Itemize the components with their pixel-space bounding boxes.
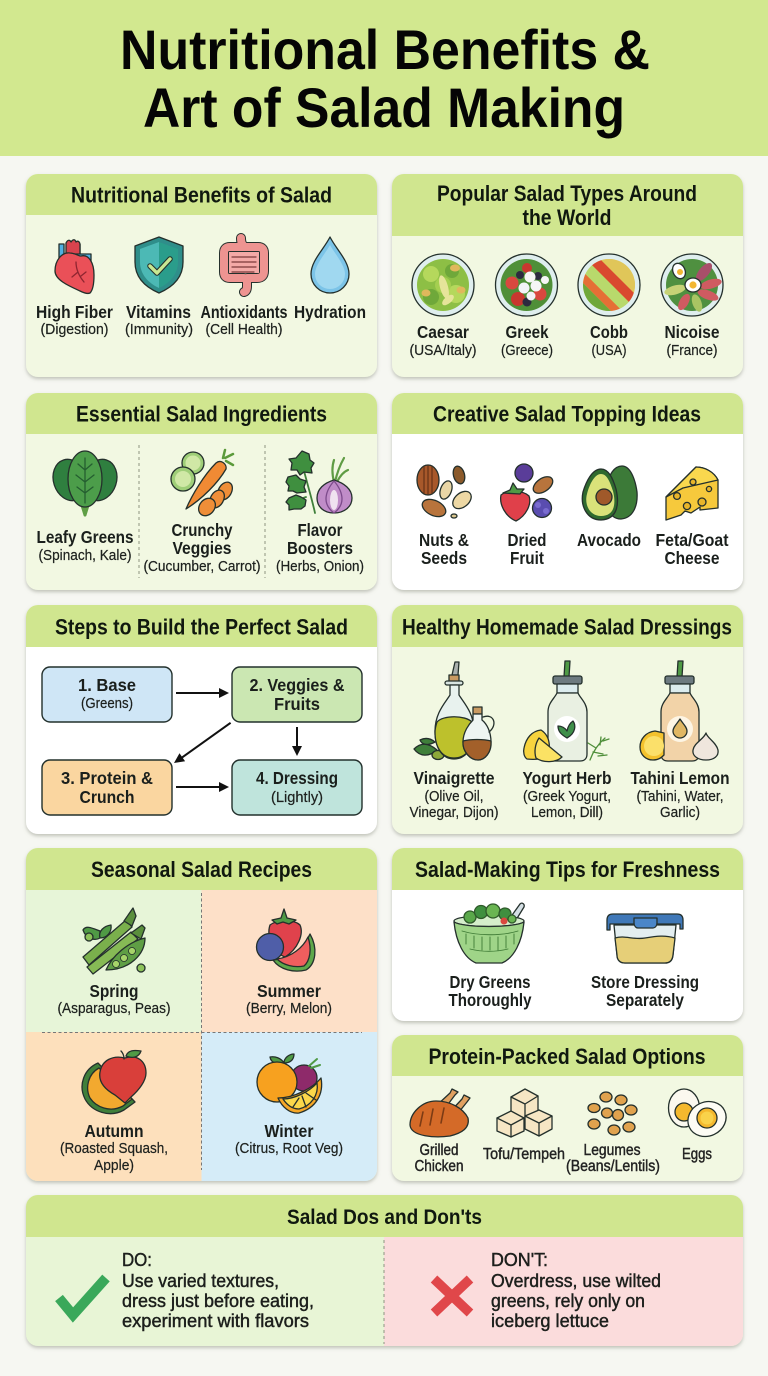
panel: dos and don'ts [26,1195,743,1346]
panel: protein options [392,1035,743,1181]
labels: Autumn [84,1121,144,1141]
heading: Creative Salad Topping Ideas [433,402,701,426]
do text [122,1250,314,1331]
heading: Salad-Making Tips for Freshness [415,857,720,882]
labels: Boosters [287,538,353,558]
labels: High Fiber [36,302,113,322]
labels: (USA/Italy) [410,342,476,359]
labels [448,972,699,1010]
step 2: 2. Veggies & [250,675,345,695]
labels: (Citrus, Root Veg) [235,1140,343,1157]
step 4: 4. Dressing [256,768,338,788]
do text: dress just before eating, [122,1291,314,1311]
heading: Salad Dos and Don'ts [287,1206,482,1229]
labels: Garlic) [660,804,700,821]
panel: toppings [392,393,743,590]
labels: Crunchy [172,520,233,540]
icon: herbs and onion [286,451,352,513]
labels: Nuts & [419,530,469,550]
labels: (Asparagus, Peas) [58,1000,170,1017]
labels: Separately [606,990,684,1010]
icon: spring asparagus [83,908,145,974]
step 2 [232,667,362,722]
labels: (Greek Yogurt, [523,788,611,805]
labels: Antioxidants [200,302,288,322]
icon: heart [55,240,94,293]
labels: (Olive Oil, [424,788,484,805]
step 1: 1. Base [78,675,136,695]
icon: shield [135,237,183,293]
title banner: Art of Salad Making [143,76,625,139]
heading [437,181,697,230]
icon: water drop [311,237,349,293]
labels: Lemon, Dill) [531,804,603,821]
labels: Hydration [294,302,366,322]
icon: summer fruits [256,909,315,971]
labels: Seeds [421,548,467,568]
labels [419,530,729,568]
labels: Avocado [577,530,641,550]
icon: winter citrus and beet [257,1054,322,1113]
labels [410,768,730,821]
labels: Vitamins [126,302,191,322]
labels: Apple) [94,1157,134,1174]
icon: caesar plate [412,254,474,316]
panel: freshness tips [392,848,743,1021]
labels: Cheese [664,548,720,568]
labels: Dry Greens [450,972,531,992]
labels: Flavor [298,520,343,540]
labels: Vinegar, Dijon) [410,804,498,821]
labels: (France) [666,342,718,359]
step 3: Crunch [80,787,134,807]
icon: tofu cubes [497,1089,552,1137]
heading: Nutritional Benefits of Salad [71,182,332,208]
labels: Thoroughly [448,990,532,1010]
don't text: iceberg lettuce [491,1311,609,1331]
labels: (Digestion) [40,321,108,338]
title banner [0,0,768,156]
labels: Nicoise [664,322,720,342]
panel: salad types [392,174,743,377]
labels [36,520,364,575]
labels: Store Dressing [591,972,699,992]
icon: boiled eggs [668,1089,732,1143]
labels [36,302,366,338]
don't text [491,1250,661,1331]
labels: Grilled [420,1142,458,1159]
labels: Tofu/Tempeh [483,1146,565,1163]
heading: Steps to Build the Perfect Salad [55,614,348,640]
labels: (Greece) [501,342,553,359]
labels: (Roasted Squash, [60,1140,168,1157]
step 1: (Greens) [81,695,133,712]
labels: Spring [90,981,138,1001]
icon: avocado [582,466,637,520]
heading: Essential Salad Ingredients [76,402,327,426]
step 4: (Lightly) [271,789,323,806]
labels [414,1142,712,1175]
do text: experiment with flavors [122,1311,309,1331]
arrows [174,688,302,792]
labels: (Cucumber, Carrot) [144,558,260,575]
do text: DO: [122,1250,152,1270]
step 3 [42,760,172,815]
icon: dressing container [607,914,683,963]
icon: spinach [48,451,122,515]
labels: Eggs [682,1146,712,1163]
heading: Seasonal Salad Recipes [91,857,312,882]
icon: grilled chicken [410,1089,470,1137]
icon: tahini bottle [640,661,718,761]
step 2: Fruits [274,694,320,714]
labels: Tahini Lemon [630,768,730,788]
labels: (Beans/Lentils) [566,1158,660,1175]
title banner: Nutritional Benefits & [120,18,650,81]
labels: Dried [508,530,546,550]
don't text: DON'T: [491,1250,548,1270]
labels: Yogurt Herb [522,768,612,788]
icon: dried fruit [501,464,556,521]
labels: Fruit [510,548,544,568]
don't text: greens, rely only on [491,1291,645,1311]
panel: nutritional benefits [26,174,377,377]
icon: cobb plate [577,253,641,317]
labels [410,322,720,359]
don't text: Overdress, use wilted [491,1271,661,1291]
labels: (Cell Health) [206,321,283,338]
labels: Leafy Greens [36,527,134,547]
panel: steps [26,605,377,834]
labels: (Berry, Melon) [246,1000,332,1017]
panel: ingredients [26,393,377,590]
labels: Cobb [590,322,628,342]
icon: check mark [59,1278,106,1315]
step 1 [42,667,172,722]
icon: cross mark [434,1279,470,1313]
panel: seasonal recipes [26,848,377,1181]
icon: greek plate [496,254,558,316]
icon: salad spinner bowl [454,903,524,963]
labels: Caesar [417,322,469,342]
labels: Winter [264,1121,314,1141]
icon: cucumber and carrot [171,450,235,519]
labels: Summer [257,981,321,1001]
heading: the World [522,205,612,230]
heading: Protein-Packed Salad Options [428,1044,706,1069]
step 4 [232,760,362,815]
labels: (Spinach, Kale) [38,547,132,564]
labels: Feta/Goat [656,530,729,550]
labels [58,981,343,1174]
labels: (USA) [592,342,626,359]
icon: autumn squash and apple [82,1051,146,1114]
panel: dressings [392,605,743,834]
labels: Chicken [414,1158,464,1175]
icon: yogurt herb bottle [524,661,609,762]
labels: Legumes [584,1142,641,1159]
icon: oil and vinegar [414,662,494,760]
labels: (Herbs, Onion) [276,558,364,575]
labels: Greek [506,322,549,342]
heading: Popular Salad Types Around [437,181,697,206]
icon: intestines [224,238,264,292]
icon: nuts [417,465,475,520]
labels: Veggies [172,538,232,558]
step 3: 3. Protein & [61,768,153,788]
do text: Use varied textures, [122,1271,279,1291]
icon: cheese [666,467,718,520]
labels: Vinaigrette [414,768,495,788]
icon: nicoise plate [661,254,723,316]
labels: (Immunity) [125,321,193,338]
icon: legumes [588,1092,637,1135]
labels: (Tahini, Water, [636,788,724,805]
